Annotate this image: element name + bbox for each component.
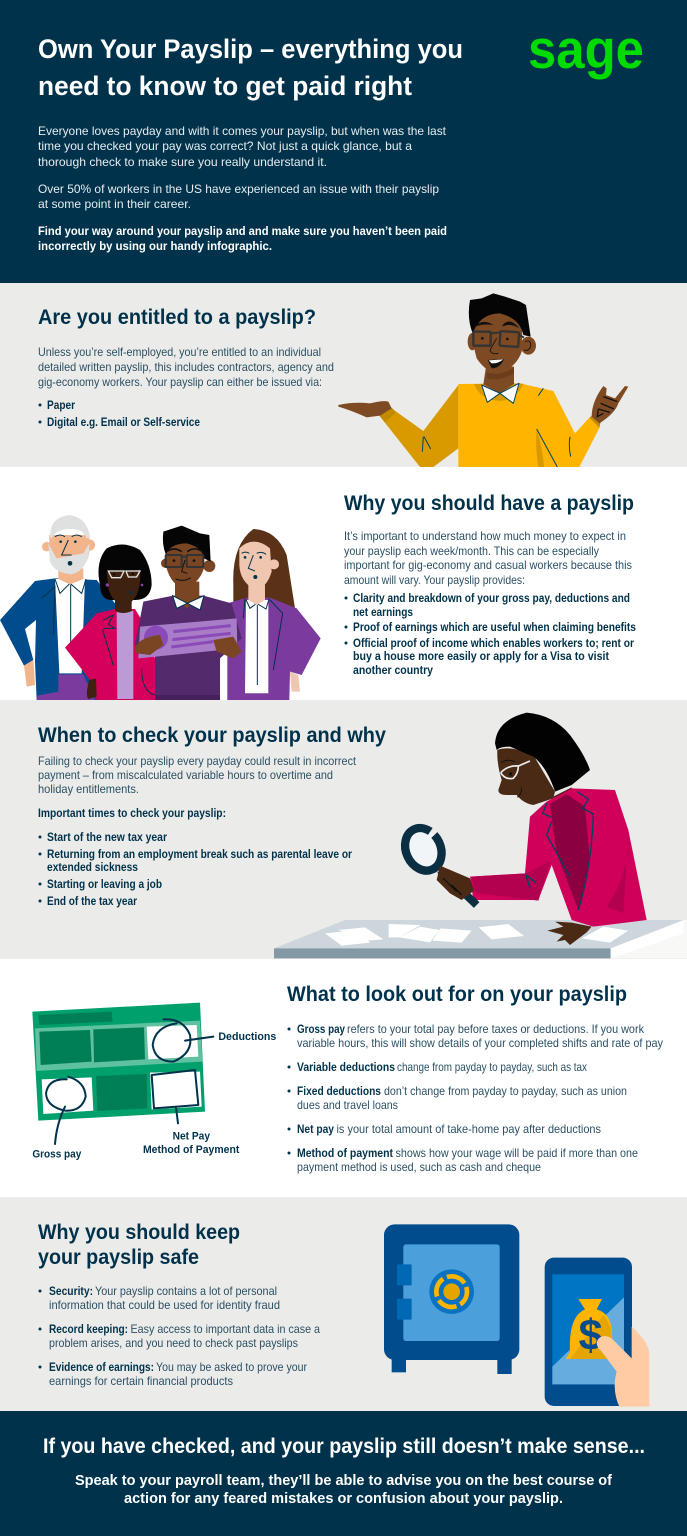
heading: entitled: Are you entitled to a payslip? bbox=[38, 306, 316, 329]
look out bullet list: payment method is used, such as cash and cheque bbox=[297, 1160, 541, 1174]
intro text: time you checked your pay was correct? Not just a quick glance, but a bbox=[38, 139, 412, 153]
figure: woman in purple bbox=[227, 529, 321, 700]
keep safe bullet list: Your payslip contains a lot of personal bbox=[95, 1284, 277, 1298]
important times bullet list: Returning from an employment break such as parental leave or bbox=[47, 847, 352, 861]
heading: look out: What to look out for on your payslip bbox=[287, 983, 627, 1006]
why have body text bbox=[344, 529, 632, 587]
heading: keep safe: Why you should keep bbox=[38, 1221, 240, 1244]
look out bullet list: is your total amount of take-home pay after deductions bbox=[336, 1122, 601, 1136]
why have body text: amount will vary. Your payslip provides: bbox=[344, 573, 525, 587]
panel: footer call to action bbox=[0, 1411, 687, 1536]
title: Own Your Payslip – everything you bbox=[38, 34, 463, 64]
bold call to action: Find your way around your payslip and and make sure you haven’t been paid bbox=[38, 224, 447, 238]
when to check body text: holiday entitlements. bbox=[38, 782, 139, 796]
look out bullet list: shows how your wage will be paid if more than one bbox=[396, 1146, 638, 1160]
when to check body text: Failing to check your payslip every payday could result in incorrect bbox=[38, 754, 357, 768]
panel: why have a payslip bbox=[0, 467, 687, 700]
important times bullet list: End of the tax year bbox=[47, 894, 137, 908]
important times bullet list bbox=[38, 830, 352, 908]
entitled bullet list: Digital e.g. Email or Self-service bbox=[47, 415, 200, 429]
why have bullet list bbox=[344, 591, 636, 677]
important times subheading: Important times to check your payslip: bbox=[38, 806, 226, 820]
icon: phone with money bag and hand bbox=[545, 1258, 649, 1407]
look out bullet list: change from payday to payday, such as tax bbox=[397, 1060, 587, 1074]
keep safe bullet list: earnings for certain financial products bbox=[49, 1374, 233, 1388]
important times bullet list: extended sickness bbox=[47, 860, 138, 874]
keep safe bullet list: Easy access to important data in case a bbox=[130, 1322, 320, 1336]
footer text: Speak to your payroll team, they’ll be able to advise you on the best course of bbox=[75, 1472, 613, 1489]
icon: phone with money bag and hand: $ bbox=[579, 1312, 603, 1360]
illustration: four colleagues bbox=[0, 515, 321, 700]
keep safe bullet list: Record keeping: bbox=[49, 1322, 128, 1336]
why have body text: important for gig-economy and casual workers because this bbox=[344, 558, 632, 572]
why have bullet list: another country bbox=[353, 663, 433, 677]
when to check body text: payment – from miscalculated variable hours to overtime and bbox=[38, 768, 333, 782]
footer heading: If you have checked, and your payslip still doesn’t make sense... bbox=[43, 1435, 645, 1458]
look out bullet list: Method of payment bbox=[297, 1146, 393, 1160]
bold call to action bbox=[38, 224, 447, 253]
footer text: action for any feared mistakes or confusion about your payslip. bbox=[124, 1490, 563, 1507]
why have bullet list: buy a house more easily or apply for a Visa to visit bbox=[353, 649, 609, 663]
heading: why have: Why you should have a payslip bbox=[344, 492, 634, 515]
look out bullet list: dues and travel loans bbox=[297, 1098, 398, 1112]
entitled body text: Unless you’re self-employed, you’re entitled to an individual bbox=[38, 345, 321, 359]
footer text bbox=[75, 1472, 613, 1507]
heading: keep safe: your payslip safe bbox=[38, 1246, 199, 1269]
illustration: annotated payslip diagram bbox=[32, 1003, 276, 1160]
statistic text bbox=[38, 182, 439, 211]
illustration: man in yellow sweater bbox=[338, 293, 628, 467]
label: net pay and method of payment: Method of Payment bbox=[143, 1144, 240, 1156]
title: need to know to get paid right bbox=[38, 71, 412, 101]
panel: what to look out for bbox=[0, 959, 687, 1197]
intro text bbox=[38, 124, 447, 169]
label: net pay and method of payment bbox=[143, 1130, 240, 1156]
keep safe bullet list: Evidence of earnings: bbox=[49, 1360, 154, 1374]
heading: keep safe bbox=[38, 1221, 240, 1269]
why have body text: your payslip each week/month. This can be especially bbox=[344, 544, 599, 558]
panel: are you entitled bbox=[0, 283, 687, 467]
keep safe bullet list: information that could be used for identity fraud bbox=[49, 1298, 280, 1312]
figure: woman in crimson jacket bbox=[65, 545, 155, 700]
label: deductions: Deductions bbox=[218, 1031, 276, 1043]
look out bullet list: don’t change from payday to payday, such as union bbox=[384, 1084, 627, 1098]
entitled bullet list bbox=[38, 398, 200, 429]
table with papers bbox=[274, 920, 687, 958]
why have bullet list: net earnings bbox=[353, 605, 413, 619]
panel: header bbox=[0, 0, 687, 283]
label: gross pay: Gross pay bbox=[32, 1148, 82, 1160]
why have bullet list: Clarity and breakdown of your gross pay, deductions and bbox=[353, 591, 630, 605]
illustration: woman inspecting papers with magnifying glass bbox=[274, 713, 687, 958]
bold call to action: incorrectly by using our handy infographic. bbox=[38, 239, 272, 253]
intro text: thorough check to make sure you really understand it. bbox=[38, 155, 327, 169]
look out bullet list: Variable deductions bbox=[297, 1060, 395, 1074]
look out bullet list: refers to your total pay before taxes or deductions. If you work bbox=[347, 1022, 645, 1036]
why have bullet list: Official proof of income which enables workers to; rent or bbox=[353, 636, 634, 650]
look out bullet list: Fixed deductions bbox=[297, 1084, 381, 1098]
entitled body text: detailed written payslip, this includes contractors, agency and bbox=[38, 360, 334, 374]
logo: sage: sage bbox=[528, 18, 644, 80]
heading: when to check: When to check your payslip and why bbox=[38, 724, 386, 747]
important times bullet list: Start of the new tax year bbox=[47, 830, 167, 844]
statistic text: Over 50% of workers in the US have experienced an issue with their payslip bbox=[38, 182, 439, 196]
panel: keep your payslip safe bbox=[0, 1197, 687, 1411]
figure: man with payslip bbox=[134, 526, 242, 700]
icon: magnifying glass bbox=[398, 822, 477, 905]
look out bullet list bbox=[288, 1022, 663, 1174]
why have body text: It’s important to understand how much money to expect in bbox=[344, 529, 626, 543]
when to check body text bbox=[38, 754, 357, 796]
label: net pay and method of payment: Net Pay bbox=[173, 1130, 211, 1142]
look out bullet list: Gross pay bbox=[297, 1022, 345, 1036]
entitled body text bbox=[38, 345, 334, 389]
statistic text: at some point in their career. bbox=[38, 197, 191, 211]
figure: older man bbox=[0, 515, 115, 700]
look out bullet list: Net pay bbox=[297, 1122, 334, 1136]
entitled bullet list: Paper bbox=[47, 398, 75, 412]
icon: safe bbox=[384, 1224, 519, 1374]
keep safe bullet list bbox=[38, 1284, 320, 1388]
why have bullet list: Proof of earnings which are useful when claiming benefits bbox=[353, 620, 636, 634]
title bbox=[38, 34, 463, 101]
keep safe bullet list: Security: bbox=[49, 1284, 93, 1298]
keep safe bullet list: problem arises, and you need to check past payslips bbox=[49, 1336, 298, 1350]
panel: when to check bbox=[0, 700, 687, 959]
intro text: Everyone loves payday and with it comes your payslip, but when was the last bbox=[38, 124, 447, 138]
entitled body text: gig-economy workers. Your payslip can either be issued via: bbox=[38, 375, 322, 389]
keep safe bullet list: You may be asked to prove your bbox=[156, 1360, 307, 1374]
important times bullet list: Starting or leaving a job bbox=[47, 877, 162, 891]
